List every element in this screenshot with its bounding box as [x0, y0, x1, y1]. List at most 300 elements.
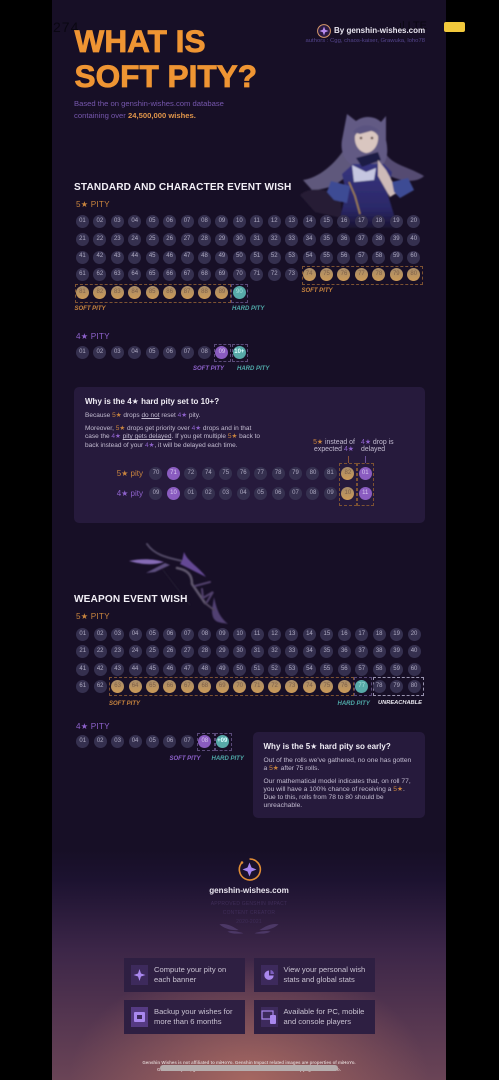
row: 5 star pity comparison — [149, 467, 372, 480]
footer disclaimer: Genshin Impact, game content and materials are trademarks and copyrights © miHoYo. — [157, 1067, 341, 1072]
row: weapon 4 star pity: +09 — [217, 738, 227, 744]
row: 5 star pity comparison: 81 — [327, 470, 334, 476]
label: hard pity: HARD PITY — [212, 756, 244, 762]
grid: standard 5 star pity: 25 — [149, 236, 156, 242]
grid: weapon 5 star pity: 67 — [184, 683, 191, 689]
row: 4 star pity comparison: 04 — [240, 490, 247, 496]
grid: standard 5 star pity: 04 — [131, 218, 138, 224]
grid: weapon 5 star pity: 10 — [236, 631, 243, 637]
grid: weapon 5 star pity: 32 — [271, 648, 278, 654]
grid: weapon 5 star pity: 48 — [201, 666, 208, 672]
label: soft pity: SOFT PITY — [193, 366, 224, 372]
grid: standard 5 star pity: 76 — [341, 271, 347, 277]
grid: standard 5 star pity: 09 — [219, 218, 225, 224]
grid: standard 5 star pity: 81 — [79, 289, 86, 295]
grid: weapon 5 star pity: 66 — [167, 683, 173, 689]
grid: weapon 5 star pity: 43 — [114, 666, 121, 672]
grid: weapon 5 star pity — [76, 628, 421, 693]
row: standard 4 star pity: 02 — [96, 349, 103, 355]
grid: standard 5 star pity: 74 — [306, 271, 312, 277]
label: hard pity: HARD PITY — [232, 306, 264, 312]
explanation text: a 5★ after 75 rolls. — [264, 765, 319, 772]
label: soft pity: SOFT PITY — [109, 700, 140, 706]
illustration: bow — [129, 542, 228, 624]
soft pity box, weapon 4 star — [197, 733, 214, 751]
explanation text — [264, 757, 411, 772]
illustration: character — [300, 114, 424, 228]
grid: standard 5 star pity: 80 — [410, 271, 417, 277]
grid: weapon 5 star pity: 47 — [184, 666, 191, 672]
grid: standard 5 star pity: 30 — [236, 236, 243, 242]
row: weapon 4 star pity: 01 — [79, 738, 86, 744]
row: 5 star pity comparison: 71 — [170, 470, 177, 476]
badge: approved content creator — [210, 901, 287, 934]
grid: weapon 5 star pity: 71 — [254, 683, 260, 689]
row: weapon 4 star pity: 08 — [201, 738, 208, 744]
badge: approved content creator: APPROVED GENSHIN IMPACT — [211, 901, 287, 907]
grid: standard 5 star pity: 27 — [184, 236, 190, 242]
authors: authors : Cgg, chaos-kaiser, Grawuka, loho78 — [306, 38, 425, 44]
page background panel — [52, 0, 446, 1080]
row: 4 star pity comparison: 11 — [362, 490, 368, 496]
grid: standard 5 star pity: 03 — [114, 218, 121, 224]
grid: standard 5 star pity: 66 — [166, 271, 173, 277]
row: 5 star pity comparison: 80 — [310, 470, 316, 476]
grid: standard 5 star pity: 22 — [96, 236, 103, 242]
grid: weapon 5 star pity: 12 — [271, 631, 278, 637]
grid: weapon 5 star pity: 23 — [114, 648, 121, 654]
icon: star — [131, 965, 148, 985]
card text — [284, 1006, 364, 1026]
grid: weapon 5 star pity: 72 — [271, 683, 278, 689]
grid: standard 5 star pity: 16 — [341, 218, 347, 224]
grid: weapon 5 star pity: 53 — [289, 666, 295, 672]
row: 5 star pity comparison: 75 — [222, 470, 229, 476]
grid: standard 5 star pity: 35 — [323, 236, 330, 242]
grid: weapon 5 star pity: 75 — [324, 683, 330, 689]
panel: why is the 4 star hard pity set to 10+ — [74, 387, 425, 523]
badge: approved content creator: 2020-2021 — [236, 919, 262, 925]
label: 4 star pity row: 4★ pity — [117, 489, 143, 498]
row: weapon 4 star pity: 02 — [97, 738, 104, 744]
explanation text: Moreover, 5★ drops get priority over 4★ drops and in that — [85, 425, 251, 432]
card text: Backup your wishes for — [154, 1006, 233, 1016]
grid: weapon 5 star pity: 30 — [236, 648, 243, 654]
card text: View your personal wish — [284, 964, 365, 974]
grid: standard 5 star pity: 18 — [376, 218, 382, 224]
grid: standard 5 star pity: 42 — [96, 253, 103, 259]
grid: weapon 5 star pity: 56 — [341, 666, 348, 672]
explanation text: Because 5★ drops do not reset 4★ pity. — [85, 412, 200, 419]
title: SOFT PITY? — [74, 58, 257, 94]
row: 5 star pity comparison: 70 — [153, 470, 159, 476]
grid: weapon 5 star pity: 54 — [306, 666, 313, 672]
status bar network label: .ıl LTE — [396, 20, 427, 32]
explanation text: back instead of your 4★, it will be delayed each time. — [85, 442, 238, 449]
badge: approved content creator: CONTENT CREATOR — [223, 910, 275, 916]
grid: weapon 5 star pity: 41 — [79, 666, 86, 672]
grid: weapon 5 star pity: 27 — [184, 648, 191, 654]
icon: archive — [131, 1007, 148, 1027]
annotation: 5 star instead of expected 4 star: expected 4★ — [314, 446, 354, 453]
grid: standard 5 star pity: 58 — [376, 253, 382, 259]
grid: weapon 5 star pity: 70 — [236, 683, 243, 689]
grid: weapon 5 star pity: 37 — [358, 648, 365, 654]
panel heading: Why is the 5★ hard pity so early? — [264, 742, 391, 751]
grid: standard 5 star pity: 23 — [114, 236, 121, 242]
grid: standard 5 star pity: 84 — [131, 289, 138, 295]
grid: standard 5 star pity: 10 — [236, 218, 243, 224]
label: 4 star pity: 4★ PITY — [76, 722, 110, 730]
grid: weapon 5 star pity: 49 — [219, 666, 226, 672]
grid: standard 5 star pity: 64 — [131, 271, 138, 277]
grid: weapon 5 star pity: 57 — [358, 666, 365, 672]
grid: standard 5 star pity: 32 — [271, 236, 278, 242]
hard pity box, roll 90 — [230, 284, 248, 302]
grid: standard 5 star pity: 39 — [393, 236, 400, 242]
grid: standard 5 star pity: 07 — [184, 218, 190, 224]
label: soft pity: SOFT PITY — [302, 288, 333, 294]
grid: standard 5 star pity: 90 — [236, 289, 243, 295]
grid: standard 5 star pity: 31 — [253, 236, 260, 242]
status bar time: 274 — [53, 19, 79, 35]
grid: weapon 5 star pity: 29 — [219, 648, 226, 654]
row: 4 star pity comparison: 05 — [257, 490, 264, 496]
explanation text: Due to this, rolls from 78 to 80 should be — [264, 794, 384, 801]
label: 4 star pity: 4★ PITY — [76, 332, 110, 340]
grid: weapon 5 star pity: 51 — [254, 666, 260, 672]
subtitle: containing over 24,500,000 wishes. — [74, 111, 196, 120]
card: available on platforms — [254, 1000, 374, 1034]
grid: weapon 5 star pity: 73 — [289, 683, 295, 689]
grid: standard 5 star pity: 13 — [288, 218, 295, 224]
soft pity range box, rolls 63 to 76 — [109, 677, 354, 696]
row: 5 star pity comparison: 01 — [362, 470, 369, 476]
grid: standard 5 star pity: 78 — [376, 271, 382, 277]
grid: standard 5 star pity: 08 — [201, 218, 208, 224]
row: standard 4 star pity: 08 — [201, 349, 208, 355]
row: 4 star pity comparison: 06 — [275, 490, 281, 496]
grid: standard 5 star pity: 88 — [201, 289, 208, 295]
annotation: 5 star instead of expected 4 star — [313, 438, 355, 453]
row: 5 star pity comparison: 82 — [344, 470, 351, 476]
grid: standard 5 star pity — [76, 215, 420, 299]
grid: weapon 5 star pity: 58 — [376, 666, 382, 672]
label: 5 star pity: 5★ PITY — [76, 200, 110, 208]
card: backup wishes — [124, 1000, 245, 1034]
row: weapon 4 star pity: 07 — [184, 738, 191, 744]
grid: standard 5 star pity: 20 — [410, 218, 417, 224]
grid: weapon 5 star pity: 28 — [201, 648, 208, 654]
hard pity box, weapon 4 star — [214, 733, 232, 751]
grid: standard 5 star pity: 40 — [410, 236, 417, 242]
grid: standard 5 star pity: 29 — [219, 236, 225, 242]
row: standard 4 star pity — [76, 346, 246, 359]
grid: standard 5 star pity: 68 — [201, 271, 208, 277]
highlight box: 4 star drop delayed — [357, 463, 374, 506]
grid: standard 5 star pity: 33 — [288, 236, 295, 242]
grid: weapon 5 star pity: 78 — [376, 683, 382, 689]
grid: weapon 5 star pity: 01 — [79, 631, 86, 637]
row: weapon 4 star pity: 06 — [167, 738, 173, 744]
explanation text — [264, 778, 411, 809]
card text: more than 6 months — [154, 1017, 222, 1026]
row: standard 4 star pity: 10+ — [234, 349, 244, 355]
row: 5 star pity comparison: 77 — [257, 470, 264, 476]
grid: standard 5 star pity: 38 — [376, 236, 382, 242]
grid: weapon 5 star pity: 13 — [289, 631, 295, 637]
grid: standard 5 star pity: 89 — [219, 289, 225, 295]
card text — [154, 964, 226, 984]
row: 4 star pity comparison: 03 — [222, 490, 229, 496]
label: unreachable: UNREACHABLE — [378, 700, 422, 706]
grid: weapon 5 star pity: 18 — [376, 631, 382, 637]
grid: weapon 5 star pity: 44 — [132, 666, 138, 672]
label: soft pity: SOFT PITY — [74, 306, 106, 312]
grid: standard 5 star pity: 28 — [201, 236, 208, 242]
grid: standard 5 star pity: 49 — [219, 253, 225, 259]
grid: standard 5 star pity: 34 — [306, 236, 312, 242]
grid: standard 5 star pity: 72 — [271, 271, 278, 277]
grid: weapon 5 star pity: 19 — [393, 631, 400, 637]
badge laurel — [220, 924, 278, 934]
grid: weapon 5 star pity: 79 — [393, 683, 400, 689]
grid: standard 5 star pity: 37 — [358, 236, 365, 242]
grid: weapon 5 star pity: 39 — [393, 648, 400, 654]
grid: standard 5 star pity: 19 — [393, 218, 400, 224]
grid: standard 5 star pity: 70 — [236, 271, 243, 277]
grid: standard 5 star pity: 02 — [96, 218, 103, 224]
card text — [284, 964, 365, 984]
label: hard pity: HARD PITY — [338, 700, 370, 706]
grid: standard 5 star pity: 41 — [79, 253, 86, 259]
grid: weapon 5 star pity: 31 — [254, 648, 260, 654]
grid: standard 5 star pity: 59 — [393, 253, 400, 259]
grid: weapon 5 star pity: 38 — [376, 648, 382, 654]
grid: standard 5 star pity: 17 — [358, 218, 365, 224]
row: 4 star pity comparison: 07 — [292, 490, 299, 496]
grid: weapon 5 star pity: 14 — [306, 631, 313, 637]
grid: weapon 5 star pity: 34 — [306, 648, 313, 654]
grid: weapon 5 star pity: 25 — [149, 648, 156, 654]
row: standard 4 star pity: 06 — [166, 349, 173, 355]
grid: weapon 5 star pity: 16 — [341, 631, 348, 637]
card text: each banner — [154, 975, 196, 984]
grid: weapon 5 star pity: 59 — [393, 666, 400, 672]
heading: standard and character event wish: STANDARD AND CHARACTER EVENT WISH — [74, 182, 291, 193]
row: 5 star pity comparison: 72 — [188, 470, 194, 476]
grid: weapon 5 star pity: 20 — [411, 631, 417, 637]
row: standard 4 star pity: 04 — [131, 349, 138, 355]
grid: weapon 5 star pity: 55 — [324, 666, 330, 672]
row: 5 star pity comparison: 74 — [205, 470, 212, 476]
annotation connector line — [365, 456, 366, 463]
heading: weapon event wish: WEAPON EVENT WISH — [74, 594, 188, 605]
row: 4 star pity comparison: 01 — [188, 490, 194, 496]
grid: weapon 5 star pity: 65 — [149, 683, 156, 689]
grid: standard 5 star pity: 60 — [410, 253, 417, 259]
grid: standard 5 star pity: 11 — [254, 218, 260, 224]
grid: standard 5 star pity: 24 — [131, 236, 138, 242]
unreachable box, rolls 78 to 80 — [372, 677, 424, 696]
grid: standard 5 star pity: 46 — [166, 253, 173, 259]
status bar battery — [444, 22, 465, 32]
grid: standard 5 star pity: 63 — [114, 271, 121, 277]
grid: standard 5 star pity: 50 — [236, 253, 243, 259]
grid: standard 5 star pity: 56 — [341, 253, 347, 259]
row: 4 star pity comparison: 09 — [327, 490, 334, 496]
grid: standard 5 star pity: 54 — [306, 253, 312, 259]
grid: weapon 5 star pity: 64 — [132, 683, 138, 689]
grid: standard 5 star pity: 15 — [323, 218, 330, 224]
grid: weapon 5 star pity: 45 — [149, 666, 156, 672]
grid: weapon 5 star pity: 33 — [289, 648, 295, 654]
row: standard 4 star pity: 03 — [114, 349, 121, 355]
grid: standard 5 star pity: 87 — [184, 289, 190, 295]
grid: weapon 5 star pity: 24 — [132, 648, 138, 654]
row: 5 star pity comparison: 76 — [240, 470, 247, 476]
credit line: By genshin-wishes.com — [334, 26, 425, 35]
grid: standard 5 star pity: 71 — [253, 271, 260, 277]
grid: weapon 5 star pity: 50 — [236, 666, 243, 672]
panel heading: Why is the 4★ hard pity set to 10+? — [85, 397, 219, 406]
grid: standard 5 star pity: 12 — [271, 218, 278, 224]
grid: weapon 5 star pity: 22 — [97, 648, 104, 654]
site name: genshin-wishes.com — [209, 886, 289, 894]
hard pity box, 4 star — [232, 344, 248, 362]
grid: weapon 5 star pity: 08 — [201, 631, 208, 637]
row: 5 star pity comparison: 78 — [275, 470, 281, 476]
row: standard 4 star pity: 09 — [219, 349, 225, 355]
card text — [154, 1006, 233, 1026]
grid: weapon 5 star pity: 46 — [167, 666, 173, 672]
hard pity box, roll 77 — [354, 677, 372, 696]
grid: standard 5 star pity: 52 — [271, 253, 278, 259]
row: weapon 4 star pity: 05 — [149, 738, 156, 744]
label: 5 star pity: 5★ PITY — [76, 612, 110, 620]
row: weapon 4 star pity: 03 — [114, 738, 121, 744]
row: 5 star pity comparison: 79 — [292, 470, 299, 476]
grid: weapon 5 star pity: 80 — [411, 683, 417, 689]
soft pity box, 4 star — [214, 344, 230, 362]
grid: weapon 5 star pity: 07 — [184, 631, 191, 637]
grid: standard 5 star pity: 57 — [358, 253, 365, 259]
explanation text: you will have a 100% chance of receiving a 5★. — [264, 786, 405, 793]
grid: standard 5 star pity: 05 — [149, 218, 156, 224]
grid: weapon 5 star pity: 06 — [167, 631, 173, 637]
grid: standard 5 star pity: 77 — [358, 271, 365, 277]
annotation: 4 star drop is delayed: 4★ drop is — [361, 438, 394, 446]
card text: stats and global stats — [284, 975, 355, 984]
grid: standard 5 star pity: 65 — [149, 271, 156, 277]
grid: weapon 5 star pity: 61 — [79, 683, 86, 689]
grid: standard 5 star pity: 55 — [323, 253, 330, 259]
grid: standard 5 star pity: 47 — [184, 253, 190, 259]
icon: devices — [260, 1007, 278, 1027]
row: 4 star pity comparison: 09 — [153, 490, 159, 496]
icon: site logo small — [317, 24, 331, 38]
grid: weapon 5 star pity: 76 — [341, 683, 348, 689]
row: 4 star pity comparison — [149, 487, 372, 500]
grid: weapon 5 star pity: 42 — [97, 666, 104, 672]
grid: standard 5 star pity: 14 — [306, 218, 312, 224]
grid: standard 5 star pity: 26 — [166, 236, 173, 242]
grid: weapon 5 star pity: 21 — [79, 648, 86, 654]
grid: standard 5 star pity: 67 — [184, 271, 190, 277]
card text: and console players — [284, 1017, 351, 1026]
grid: standard 5 star pity: 45 — [149, 253, 156, 259]
grid: standard 5 star pity: 61 — [79, 271, 86, 277]
grid: standard 5 star pity: 01 — [79, 218, 86, 224]
grid: weapon 5 star pity: 09 — [219, 631, 226, 637]
grid: standard 5 star pity: 83 — [114, 289, 121, 295]
row: standard 4 star pity: 01 — [79, 349, 86, 355]
grid: weapon 5 star pity: 35 — [324, 648, 330, 654]
footer disclaimer — [142, 1060, 356, 1072]
row: 4 star pity comparison: 02 — [205, 490, 212, 496]
explanation text: Out of the rolls we've gathered, no one has gotten — [264, 757, 411, 764]
row: standard 4 star pity: 07 — [184, 349, 190, 355]
row: 4 star pity comparison: 08 — [310, 490, 316, 496]
grid: weapon 5 star pity: 36 — [341, 648, 348, 654]
grid: weapon 5 star pity: 77 — [358, 683, 365, 689]
card: compute your pity — [124, 958, 245, 992]
grid: weapon 5 star pity: 63 — [114, 683, 121, 689]
grid: weapon 5 star pity: 03 — [114, 631, 121, 637]
grid: weapon 5 star pity: 60 — [411, 666, 417, 672]
grid: standard 5 star pity: 43 — [114, 253, 121, 259]
grid: weapon 5 star pity: 62 — [97, 683, 104, 689]
row: weapon 4 star pity: 04 — [132, 738, 138, 744]
grid: weapon 5 star pity: 26 — [167, 648, 173, 654]
soft pity range box, rolls 81 to 89 — [74, 284, 230, 302]
annotation: 4 star drop is delayed: delayed — [361, 446, 385, 453]
explanation text — [85, 425, 260, 449]
title — [74, 23, 257, 94]
card text: Available for PC, mobile — [284, 1006, 364, 1016]
label: soft pity: SOFT PITY — [170, 756, 201, 762]
annotation: 5 star instead of expected 4 star: 5★ instead of — [313, 438, 355, 446]
row: weapon 4 star pity — [76, 735, 229, 748]
card: personal wish stats — [254, 958, 374, 992]
grid: standard 5 star pity: 53 — [288, 253, 295, 259]
grid: weapon 5 star pity: 11 — [254, 631, 260, 637]
grid: weapon 5 star pity: 69 — [219, 683, 226, 689]
grid: standard 5 star pity: 51 — [253, 253, 260, 259]
annotation: 4 star drop is delayed — [361, 438, 394, 453]
subtitle: Based the on genshin-wishes.com database — [74, 99, 224, 108]
redaction bar — [160, 1064, 338, 1071]
grid: standard 5 star pity: 82 — [96, 289, 103, 295]
grid: weapon 5 star pity: 40 — [411, 648, 417, 654]
grid: weapon 5 star pity: 04 — [132, 631, 138, 637]
grid: standard 5 star pity: 62 — [96, 271, 103, 277]
icon: site logo large — [238, 858, 262, 881]
panel: why is the 5 star hard pity so early — [253, 732, 425, 818]
grid: standard 5 star pity: 69 — [219, 271, 225, 277]
grid: weapon 5 star pity: 68 — [201, 683, 208, 689]
row: 4 star pity comparison: 10 — [344, 490, 351, 496]
explanation text: Our mathematical model indicates that, on roll 77, — [264, 778, 411, 785]
subtitle — [74, 99, 224, 120]
grid: standard 5 star pity: 75 — [323, 271, 330, 277]
row: standard 4 star pity: 05 — [149, 349, 156, 355]
grid: standard 5 star pity: 21 — [79, 236, 86, 242]
label: hard pity: HARD PITY — [237, 366, 269, 372]
row: 4 star pity comparison: 10 — [170, 490, 177, 496]
footer disclaimer: Genshin Wishes is not affiliated to miHoYo. Genshin Impact related images are properties of miHoYo. — [142, 1060, 356, 1064]
grid: standard 5 star pity: 79 — [393, 271, 400, 277]
